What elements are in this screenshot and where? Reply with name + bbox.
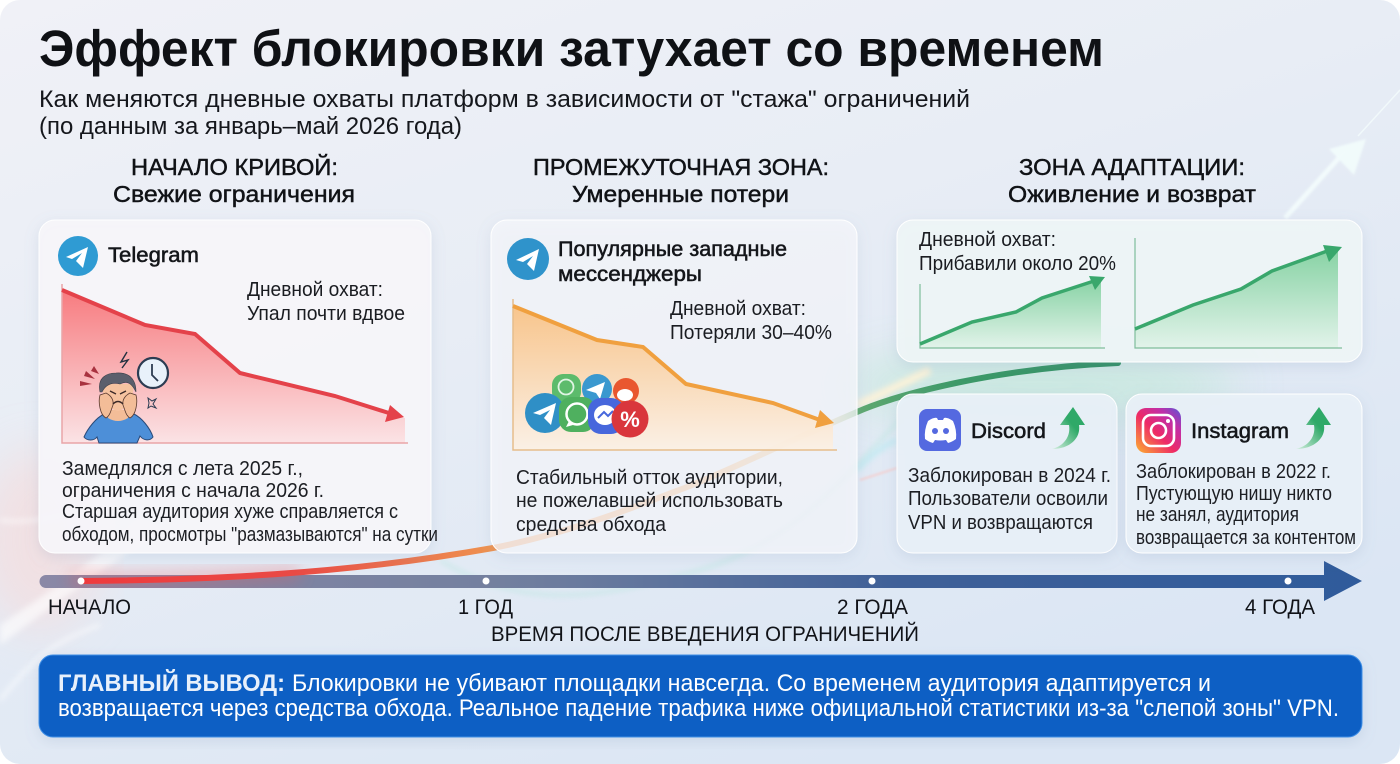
panel text: ограничения с начала 2026 г. bbox=[62, 479, 324, 502]
reach note: Упал почти вдвое bbox=[247, 302, 405, 325]
panel text: Заблокирован в 2022 г. bbox=[1136, 460, 1331, 483]
heading: intermediate zone: Умеренные потери bbox=[572, 181, 789, 207]
heading: adaptation zone bbox=[1008, 154, 1256, 207]
panel text bbox=[62, 457, 438, 546]
panel: Instagram bbox=[1126, 394, 1362, 553]
platform name: Discord bbox=[971, 419, 1046, 443]
timeline labels: 2 ГОДА bbox=[837, 596, 908, 619]
callout: main conclusion bbox=[39, 655, 1362, 737]
platform name bbox=[558, 237, 787, 286]
reach note: Дневной охват: bbox=[247, 278, 383, 301]
heading: start of curve bbox=[113, 153, 355, 207]
timeline axis title: ВРЕМЯ ПОСЛЕ ВВЕДЕНИЯ ОГРАНИЧЕНИЙ bbox=[491, 622, 919, 646]
platform name: мессенджеры bbox=[558, 262, 702, 286]
panel text bbox=[516, 466, 783, 536]
panel text: Заблокирован в 2024 г. bbox=[908, 464, 1111, 487]
callout: main conclusion: ГЛАВНЫЙ ВЫВОД: bbox=[58, 669, 285, 697]
panel: growth charts bbox=[897, 220, 1362, 362]
heading: start of curve: НАЧАЛО КРИВОЙ: bbox=[131, 153, 338, 180]
subtitle: (по данным за январь–май 2026 года) bbox=[39, 113, 462, 140]
timeline labels: 4 ГОДА bbox=[1245, 596, 1315, 619]
heading: adaptation zone: Оживление и возврат bbox=[1008, 181, 1256, 207]
panel: Western messengers bbox=[491, 220, 857, 553]
reach note bbox=[247, 278, 405, 325]
panel text: возвращается за контентом bbox=[1136, 526, 1356, 549]
panel text: Замедлялся с лета 2025 г., bbox=[62, 457, 303, 480]
subtitle: Как меняются дневные охваты платформ в зависимости от "стажа" ограничений bbox=[39, 86, 970, 113]
panel: Telegram bbox=[39, 220, 438, 553]
icon: Telegram bbox=[58, 236, 98, 276]
panel text: средства обхода bbox=[516, 513, 667, 536]
reach note: Потеряли 30–40% bbox=[670, 321, 832, 344]
heading: intermediate zone bbox=[533, 154, 829, 207]
panel text: VPN и возвращаются bbox=[908, 511, 1093, 534]
timeline labels: НАЧАЛО bbox=[48, 596, 131, 619]
callout: main conclusion: Блокировки не убивают площадки навсегда. Со временем аудитория адаптируется и bbox=[292, 670, 1211, 697]
chart: Telegram decline bbox=[62, 284, 408, 443]
timeline arrow bbox=[40, 561, 1362, 601]
icon: messenger cluster bbox=[525, 374, 648, 438]
reach note: Дневной охват: bbox=[919, 228, 1056, 251]
timeline labels: 1 ГОД bbox=[458, 596, 513, 619]
timeline start dot bbox=[78, 578, 84, 584]
panel text: обходом, просмотры "размазываются" на сутки bbox=[62, 523, 438, 546]
reach note bbox=[919, 228, 1116, 275]
panel text: не пожелавшей использовать bbox=[516, 489, 783, 512]
platform name: Telegram bbox=[108, 243, 199, 267]
heading: start of curve: Свежие ограничения bbox=[113, 181, 355, 207]
chart: Instagram growth bbox=[1135, 238, 1342, 348]
heading: intermediate zone: ПРОМЕЖУТОЧНАЯ ЗОНА: bbox=[533, 154, 829, 180]
panel text bbox=[908, 464, 1111, 534]
callout: main conclusion: возвращается через средства обхода. Реальное падение трафика ниже официальной статистики из-за "слепой зоны" VPN. bbox=[58, 695, 1339, 722]
platform name: Популярные западные bbox=[558, 237, 787, 261]
growth curve from timeline bbox=[81, 363, 1118, 581]
chart: Discord growth bbox=[920, 276, 1105, 348]
reach note bbox=[670, 297, 832, 344]
reach note: Дневной охват: bbox=[670, 297, 806, 320]
timeline labels bbox=[48, 596, 1315, 619]
icon: stressed person with clock bbox=[80, 352, 168, 443]
reach note: Прибавили около 20% bbox=[919, 252, 1116, 275]
icon: Instagram bbox=[1136, 408, 1181, 453]
icon: messenger cluster: % bbox=[620, 407, 640, 432]
icon: Discord bbox=[919, 409, 961, 451]
panel: Discord bbox=[897, 394, 1117, 553]
icon: Telegram bbox=[507, 238, 549, 280]
title: Эффект блокировки затухает со временем bbox=[39, 20, 1104, 77]
panel text: не занял, аудитория bbox=[1136, 503, 1299, 526]
icon: up arrow bbox=[1052, 407, 1085, 449]
panel text bbox=[1136, 460, 1356, 549]
panel text: Пустующую нишу никто bbox=[1136, 482, 1332, 505]
panel text: Стабильный отток аудитории, bbox=[516, 466, 783, 489]
chart: messengers decline bbox=[513, 299, 837, 450]
panel text: Старшая аудитория хуже справляется с bbox=[62, 500, 398, 523]
panel text: Пользователи освоили bbox=[908, 487, 1108, 510]
platform name: Instagram bbox=[1191, 419, 1289, 443]
icon: up arrow bbox=[1296, 407, 1331, 449]
heading: adaptation zone: ЗОНА АДАПТАЦИИ: bbox=[1019, 154, 1245, 180]
subtitle bbox=[39, 86, 970, 140]
